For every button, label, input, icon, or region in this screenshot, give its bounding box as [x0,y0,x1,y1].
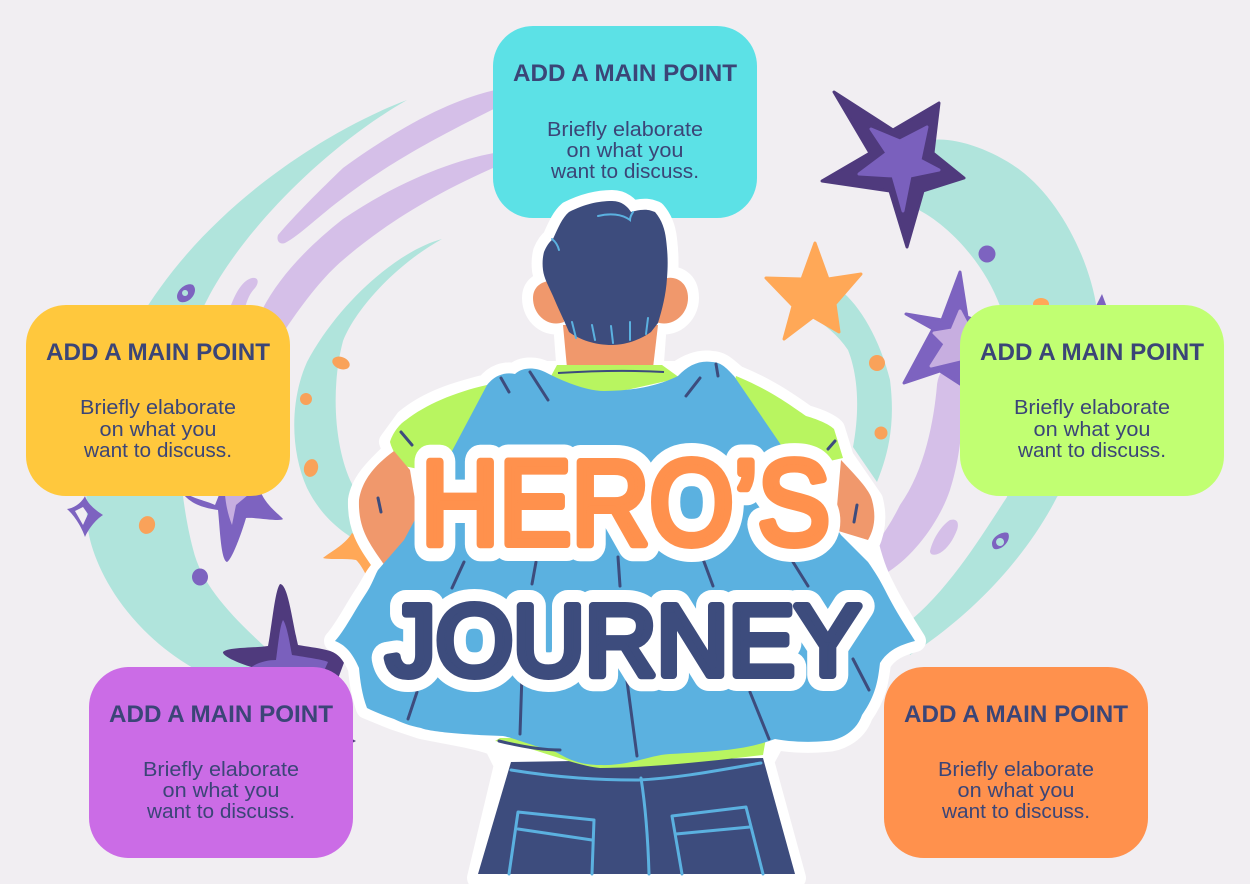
dot: orange left 3 [302,457,320,479]
star: orange behind hero lower left [323,533,390,590]
card body text: want to discuss. [83,440,232,462]
swirl: lilac right band [868,345,965,572]
hero white sticker outline [335,201,915,878]
hero figure [335,201,915,878]
card: right lime [960,305,1224,496]
star: small purple diamond [67,496,103,537]
dot: purple left [192,568,208,586]
dot: orange left 4 [136,514,158,536]
swirl: lilac stroke 1 [277,89,500,244]
swirl: lilac small right stroke [930,520,958,555]
swirl: large teal right crescent [905,140,1097,655]
title: HERO'S JOURNEY [386,436,861,697]
card: left yellow [26,305,290,496]
title word: HERO'S: HERO’S [421,436,830,570]
card body text: want to discuss. [941,801,1090,823]
dot: orange right 2 [874,426,888,440]
star: dark purple lower left [223,584,356,744]
swirl: lilac stroke 2 [262,152,500,330]
dot: orange right 1 [869,355,885,371]
hero ears [533,278,688,323]
card body text: Briefly elaborate [143,759,299,781]
swirl: small teal right arc [810,290,892,482]
card heading: ADD A MAIN POINT [980,339,1204,366]
dot: purple ring right [992,533,1009,549]
dot: orange peek right [1033,298,1049,310]
star: purple peek right [1094,294,1108,310]
card body text: on what you [566,140,684,162]
card body text [938,759,1094,823]
stars [67,92,1108,744]
card body text: on what you [1034,419,1150,441]
card body text: on what you [958,780,1074,802]
swirl: inner teal left crescent [294,239,442,545]
star: purple left behind yellow card [180,480,283,562]
dots [136,246,1009,586]
card: top cyan [493,26,757,218]
hero arms [359,451,874,566]
card heading: ADD A MAIN POINT [46,339,270,366]
card body text: Briefly elaborate [80,397,236,419]
card body text: Briefly elaborate [547,119,703,141]
card: lower left purple [89,667,353,858]
card body text: on what you [100,419,216,441]
title word: HERO'S: HERO’S [421,436,830,570]
title word: JOURNEY: JOURNEY [386,585,861,697]
card body text [80,397,236,462]
dot: purple right [978,246,996,262]
card heading: ADD A MAIN POINT [109,701,333,728]
card body text: want to discuss. [550,161,699,183]
card heading: ADD A MAIN POINT [513,60,737,87]
card body text: Briefly elaborate [1014,397,1170,419]
swirls: left [86,89,500,680]
card body text: want to discuss. [1017,440,1166,462]
dot: orange left 1 [330,354,352,372]
card body text [143,759,299,823]
swirl: large teal left crescent [86,100,407,680]
swirls: right [810,140,1097,655]
star: purple right behind green card [904,272,1000,400]
star: dark purple top right [822,92,964,247]
card body text [1014,397,1170,462]
hero cape [335,362,915,765]
hero pants [478,758,795,874]
hero neck [563,325,658,368]
dot: orange left 2 [300,393,312,405]
card body text: on what you [162,780,280,802]
card body text: want to discuss. [146,801,295,823]
card: lower right orange [884,667,1148,858]
star: orange right [766,243,861,339]
hero hair [543,201,668,345]
title word: JOURNEY: JOURNEY [386,585,861,697]
hero collar [550,365,680,395]
card body text: Briefly elaborate [938,759,1094,781]
hero lime shirt [390,376,843,768]
swirl: lilac small stroke [231,278,258,308]
card body text [547,119,703,183]
card heading: ADD A MAIN POINT [904,701,1128,728]
dot: purple ring left [177,284,195,302]
